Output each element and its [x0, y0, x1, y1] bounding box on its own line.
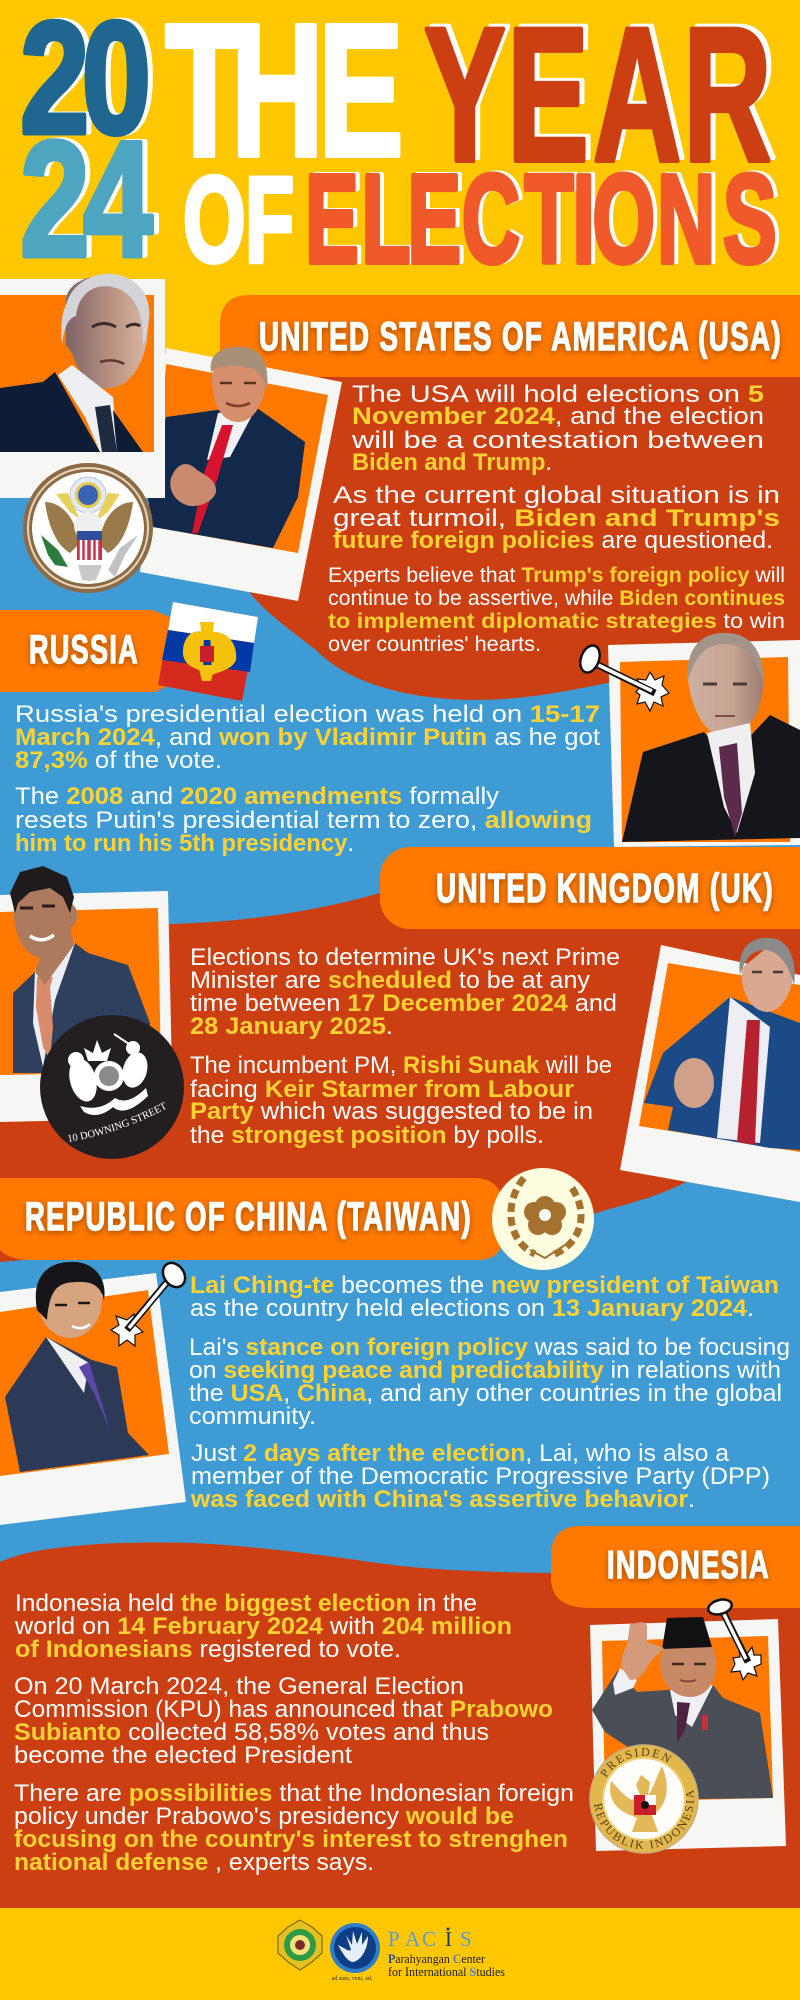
Russia paragraph 2	[15, 783, 592, 857]
icon: 10 Downing Street badge: 10 DOWNING STREET	[68, 1102, 166, 1142]
Indonesia paragraph 3	[14, 1780, 574, 1876]
USA paragraph 3: Experts believe that Trump's foreign policy will	[328, 564, 785, 587]
Indonesia paragraph 2: become the elected President	[14, 1742, 352, 1769]
UK paragraph 2: Party which was suggested to be in	[190, 1098, 593, 1125]
UK paragraph 2: facing Keir Starmer from Labour	[190, 1076, 574, 1103]
logo: blue oval: ad sum, veni, ad.	[332, 1976, 373, 1982]
Indonesia paragraph 1: world on 14 February 2024 with 204 million	[14, 1613, 512, 1640]
UK paragraph 1	[190, 944, 620, 1040]
UK heading bar	[380, 847, 800, 929]
UK paragraph 1: 28 January 2025 .	[190, 1013, 393, 1040]
Taiwan paragraph 2	[189, 1334, 790, 1430]
footer band	[0, 1908, 800, 2000]
UK paragraph 1: Minister are scheduled to be at any	[190, 967, 591, 994]
Taiwan paragraph 2: the USA, China, and any other countries in the global	[189, 1380, 782, 1407]
Russia heading: RUSSIA	[29, 628, 139, 672]
icon: Indonesia presidential seal: PRESIDEN	[600, 1748, 672, 1778]
Russia text	[15, 701, 600, 857]
photo: Sunak polaroid	[0, 866, 173, 1122]
icon: Indonesia presidential seal	[589, 1744, 699, 1854]
Taiwan text	[189, 1272, 790, 1513]
Russia paragraph 1: Russia's presidential election was held on 15-17	[15, 701, 600, 728]
UK paragraph 1: Elections to determine UK's next Prime	[190, 944, 620, 971]
Russia paragraph 1	[15, 701, 600, 774]
Taiwan paragraph 1	[190, 1272, 779, 1322]
Indonesia heading bar	[551, 1526, 800, 1608]
Russia paragraph 1: March 2024 , and won by Vladimir Putin as he got	[15, 724, 600, 751]
Indonesia paragraph 2	[14, 1673, 553, 1769]
Indonesia paragraph 3: policy under Prabowo's presidency would be	[14, 1803, 514, 1830]
USA paragraph 2: future foreign policies are questioned.	[333, 527, 773, 554]
UK text	[190, 944, 620, 1149]
USA paragraph 3	[328, 564, 785, 656]
Russia heading bar	[0, 610, 172, 692]
Russia paragraph 2: him to run his 5th presidency.	[15, 830, 354, 857]
logo: PACIS wordmark	[388, 1927, 505, 1979]
Indonesia paragraph 3: There are possibilities that the Indonesian foreign	[14, 1780, 574, 1807]
Indonesia paragraph 3: focusing on the country's interest to strenghen	[14, 1826, 568, 1853]
USA paragraph 2: As the current global situation is in	[333, 482, 780, 509]
red background: USA	[230, 377, 800, 700]
title	[20, 0, 781, 292]
logo: university shield	[278, 1920, 322, 1970]
USA paragraph 3: over countries' hearts.	[328, 633, 541, 656]
USA heading bar	[220, 295, 800, 377]
Taiwan paragraph 2: Lai's stance on foreign policy was said to be focusing	[189, 1334, 790, 1361]
icon: 10 Downing Street badge	[40, 1015, 184, 1159]
Indonesia paragraph 3: national defense , experts says.	[14, 1849, 374, 1876]
Russia paragraph 2: resets Putin's presidential term to zero, allowing	[15, 807, 592, 834]
Taiwan heading bar	[0, 1178, 503, 1260]
USA paragraph 2: great turmoil, Biden and Trump's	[333, 505, 780, 532]
title: OF: OF	[183, 151, 294, 287]
title: 24: 24	[25, 106, 158, 291]
Taiwan paragraph 3	[190, 1440, 770, 1513]
icon: Russian flag	[158, 602, 258, 701]
Indonesia paragraph 1: Indonesia held the biggest election in the	[15, 1590, 477, 1617]
Indonesia paragraph 1: of Indonesians registered to vote.	[15, 1636, 401, 1663]
USA paragraph 1: The USA will hold elections on 5	[352, 381, 764, 408]
Russia paragraph 1: 87,3% of the vote.	[15, 747, 222, 774]
Taiwan paragraph 2: community.	[189, 1403, 316, 1430]
Indonesia paragraph 2: Commission (KPU) has announced that Prabowo	[14, 1696, 553, 1723]
red background: UK	[0, 893, 800, 1262]
USA paragraph 1: will be a contestation between	[351, 427, 764, 454]
Indonesia text	[14, 1590, 574, 1876]
photo: Trump polaroid	[140, 347, 342, 601]
title: ELECTIONS: ELECTIONS	[309, 148, 781, 289]
Indonesia paragraph 2: On 20 March 2024, the General Election	[14, 1673, 464, 1700]
USA paragraph 2	[333, 482, 780, 554]
USA paragraph 1: November 2024 , and the election	[352, 403, 764, 430]
Indonesia paragraph 1	[14, 1590, 512, 1663]
UK paragraph 1: time between 17 December 2024 and	[190, 990, 617, 1017]
USA paragraph 1: Biden and Trump.	[352, 449, 552, 476]
Taiwan paragraph 2: on seeking peace and predictability in relations with	[189, 1357, 781, 1384]
Taiwan paragraph 3: was faced with China's assertive behavior .	[190, 1486, 695, 1513]
USA paragraph 3: continue to be assertive, while Biden continues	[328, 587, 785, 610]
Taiwan paragraph 1: as the country held elections on 13 January 2024.	[190, 1295, 754, 1322]
icon: Prabowo pin	[707, 1597, 761, 1680]
Taiwan paragraph 3: Just 2 days after the election, Lai, who is also a	[191, 1440, 729, 1467]
photo: Putin polaroid	[608, 633, 800, 847]
photo: Biden polaroid	[0, 274, 165, 498]
blue background band	[0, 480, 800, 1600]
USA paragraph 3: to implement diplomatic strategies to win	[328, 610, 785, 633]
icon: Taiwan emblem	[492, 1168, 594, 1270]
Russia paragraph 2: The 2008 and 2020 amendments formally	[15, 783, 500, 810]
UK paragraph 2: the strongest position by polls.	[190, 1122, 544, 1149]
Taiwan heading: REPUBLIC OF CHINA (TAIWAN)	[25, 1195, 472, 1239]
photo: Lai polaroid	[0, 1262, 186, 1525]
USA text	[328, 381, 785, 656]
logo: PACIS wordmark: PAC I S	[388, 1927, 472, 1951]
logo: PACIS wordmark: for International Studies	[388, 1964, 505, 1979]
Taiwan paragraph 3: member of the Democratic Progressive Party (DPP)	[191, 1463, 770, 1490]
USA paragraph 1	[351, 381, 764, 476]
Taiwan paragraph 1: Lai Ching-te becomes the new president of Taiwan	[190, 1272, 779, 1299]
photo: Starmer polaroid	[620, 938, 800, 1202]
UK paragraph 2	[190, 1052, 612, 1149]
icon: Putin pin	[577, 643, 669, 711]
icon: Lai pin	[111, 1259, 190, 1346]
photo: Prabowo polaroid	[590, 1617, 786, 1851]
Indonesia paragraph 2: Subianto collected 58,58% votes and thus	[14, 1719, 489, 1746]
icon: Indonesia presidential seal: REPUBLIK INDONESIA	[594, 1790, 694, 1849]
title: 24: 24	[20, 107, 153, 292]
red background: Indonesia	[0, 1542, 800, 1908]
icon: USA great seal	[23, 463, 153, 593]
logo: PACIS wordmark: Parahyangan Center	[388, 1951, 486, 1966]
logo: blue oval	[330, 1923, 380, 1982]
title: ELECTIONS: ELECTIONS	[305, 149, 777, 290]
footer logos	[278, 1920, 505, 1982]
UK paragraph 2: The incumbent PM, Rishi Sunak will be	[190, 1052, 612, 1079]
